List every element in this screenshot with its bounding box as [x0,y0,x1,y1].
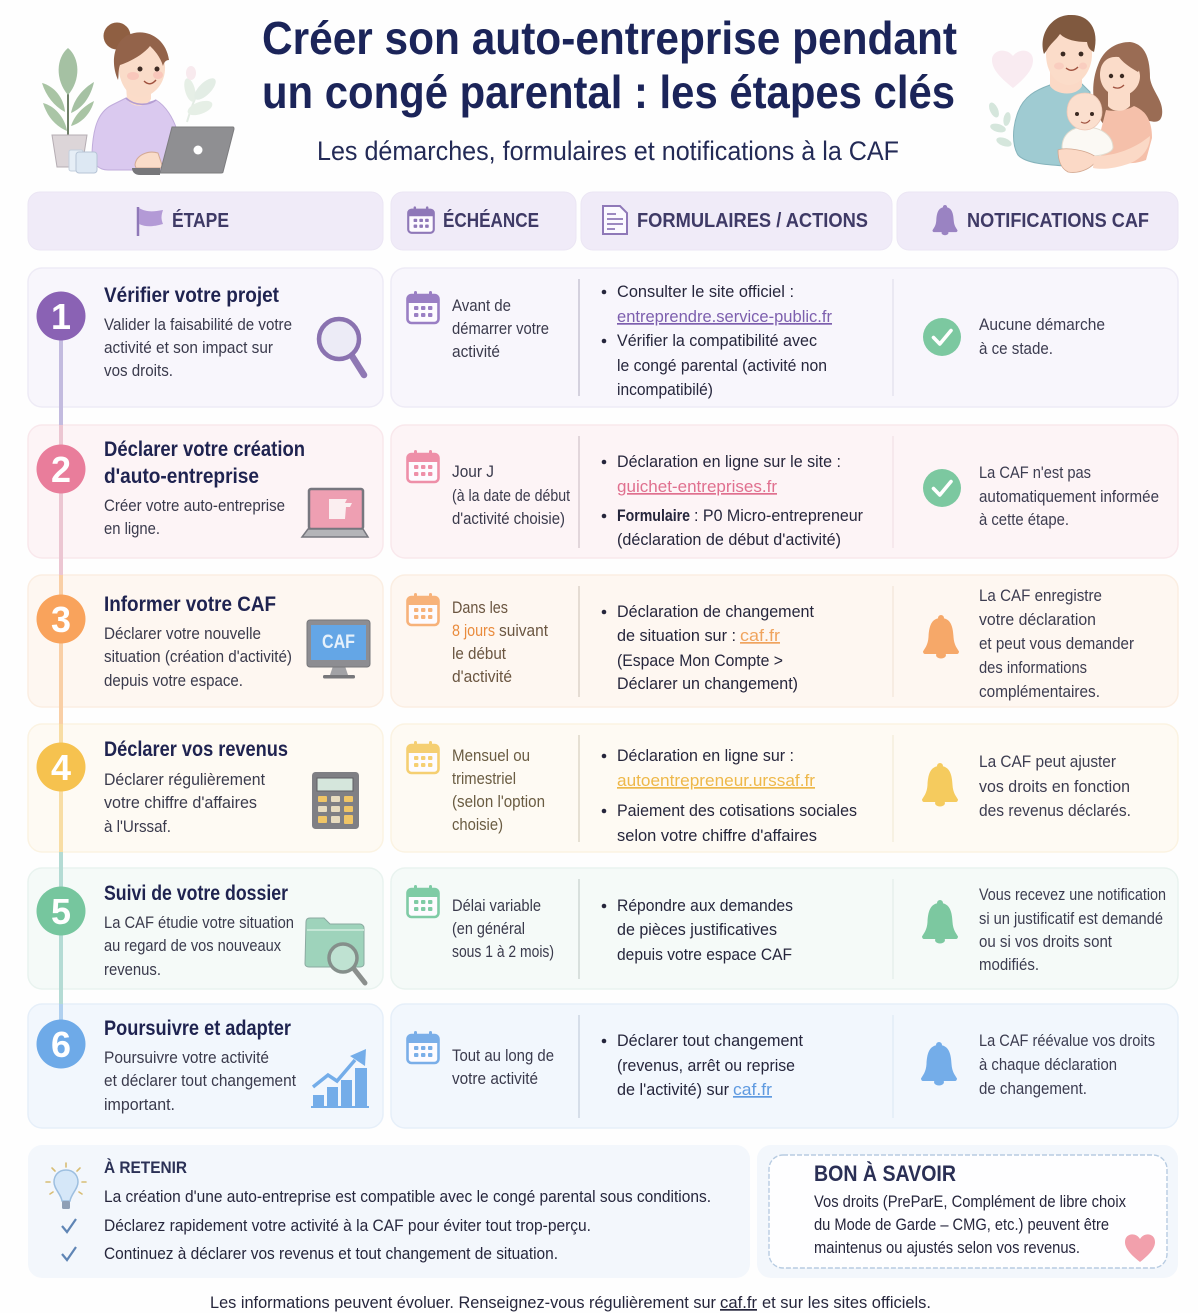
step 3 details card: des informations [979,659,1087,677]
icon: heart [1125,1234,1155,1262]
step 5 details card: Vous recevez une notification [979,886,1166,904]
step 3 details card: votre déclaration [979,611,1096,629]
panel: bon à savoir: BON À SAVOIR [814,1161,956,1186]
step 2 details card: Déclaration en ligne sur le site : [617,452,841,471]
panel: à retenir: Déclarez rapidement votre activité à la CAF pour éviter tout trop-perçu. [104,1216,591,1235]
step number 6: 6 [51,1024,71,1065]
step 4 details card: Mensuel ou [452,747,530,765]
footer note: et sur les sites officiels. [762,1293,931,1312]
step number 2: 2 [51,449,71,490]
header: notifications [897,192,1178,250]
icon: calculator [312,772,359,829]
step 3 details card: Dans les [452,599,508,617]
step 4 card: Déclarer vos revenus [104,738,288,761]
panel: bon à savoir: Vos droits (PreParE, Complément de libre choix [814,1192,1126,1211]
step 3 details card: Déclarer un changement) [617,674,798,693]
step number 2 [36,444,86,494]
step 1 card: Valider la faisabilité de votre [104,316,292,334]
header: échéance [391,192,576,250]
step 6 card [28,1004,383,1128]
subtitle: Les démarches, formulaires et notifications à la CAF [317,136,899,166]
step 1 card: activité et son impact sur [104,339,273,357]
step 4 details card: vos droits en fonction [979,778,1130,796]
step 1 details card: à ce stade. [979,340,1053,358]
step 4 details card: des revenus déclarés. [979,802,1131,820]
header: échéance: ÉCHÉANCE [443,209,539,232]
step 2 row [28,425,1178,558]
icon: bell [921,1042,957,1086]
step 4 details card: choisie) [452,816,503,834]
header: étape: ÉTAPE [172,209,229,232]
step 3 details card: complémentaires. [979,683,1100,701]
step 5 details card: de pièces justificatives [617,920,777,939]
step 6 card: Poursuivre votre activité [104,1049,269,1067]
step 3 details card: La CAF enregistre [979,587,1102,605]
step 2 details card: guichet-entreprises.fr [617,477,777,496]
step 6 row [28,1004,1178,1128]
step 3 details card: et peut vous demander [979,635,1134,653]
icon: calendar [408,450,438,482]
step 3 details card: le début [452,645,506,663]
step 2 details card [391,425,1178,558]
step 5 details card: modifiés. [979,956,1039,974]
step 6 card: Poursuivre et adapter [104,1017,291,1040]
step 3 card: situation (création d'activité) [104,648,292,666]
step 3 details card: suivant [499,622,548,640]
step 4 details card: Déclaration en ligne sur : [617,746,794,765]
step 6 details card: votre activité [452,1070,538,1088]
step 6 card: et déclarer tout changement [104,1072,296,1090]
step 1 details card: incompatibilé) [617,380,713,399]
icon: check [923,318,961,356]
icon: CAF monitor [307,620,370,678]
step 5 details card: ou si vos droits sont [979,933,1112,951]
icon: laptop [302,489,368,537]
table header row [28,192,1178,250]
step 1 row [28,268,1178,407]
step 4 card: à l'Urssaf. [104,818,171,836]
icon: bell [922,900,958,944]
step number 4: 4 [51,747,71,788]
footer note: caf.fr [720,1293,757,1312]
step 5 details card: depuis votre espace CAF [617,945,792,964]
step number 4 [36,742,86,792]
step 6 details card: à chaque déclaration [979,1056,1117,1074]
step 4 details card: La CAF peut ajuster [979,753,1116,771]
step 6 details card: Déclarer tout changement [617,1031,803,1050]
step number 1: 1 [51,296,71,337]
panel: à retenir: À RETENIR [104,1158,187,1177]
step 6 details card: La CAF réévalue vos droits [979,1032,1155,1050]
step 2 details card: (à la date de début [452,487,570,505]
footer note: Les informations peuvent évoluer. Renseignez-vous régulièrement sur [210,1293,716,1312]
step 1 details card: Aucune démarche [979,316,1105,334]
step 3 details card: Déclaration de changement [617,602,814,621]
step 2 card: Déclarer votre création [104,438,305,461]
step number 1 [36,292,86,340]
panel: à retenir: La création d'une auto-entreprise est compatible avec le congé parental sous conditions. [104,1187,711,1206]
step 1 details card: Vérifier la compatibilité avec [617,331,817,350]
step 5 row [28,868,1178,989]
step 2 details card: à cette étape. [979,511,1069,529]
step number 5 [36,886,86,936]
step 4 details card [391,724,1178,852]
step 2 details card: : P0 Micro-entrepreneur [694,506,863,525]
title: Créer son auto-entreprise pendant [262,12,957,64]
panel: à retenir: Continuez à déclarer vos revenus et tout changement de situation. [104,1244,558,1263]
header: étape [28,192,383,250]
timeline with numbered circles [36,292,86,1068]
icon: light bulb [46,1163,86,1209]
step 1 details card: entreprendre.service-public.fr [617,307,832,326]
step 3 details card: 8 jours [452,622,495,640]
step 4 card: Déclarer régulièrement [104,771,265,789]
icon: check [923,469,961,507]
step 1 details card: démarrer votre [452,320,549,338]
step 5 details card: Délai variable [452,897,541,915]
step 2 details card: d'activité choisie) [452,510,565,528]
step 3 details card: de situation sur : [617,626,736,645]
title [262,12,957,118]
step 3 details card: d'activité [452,668,512,686]
step 2 card: Créer votre auto-entreprise [104,497,285,515]
icon: growth chart [311,1049,369,1108]
step 5 card: revenus. [104,961,161,979]
title: un congé parental : les étapes clés [262,66,955,118]
panel: bon à savoir [757,1145,1178,1278]
icon: calendar [408,885,438,917]
step 3 row [28,575,1178,707]
icon: magnifying glass [319,319,364,375]
header: formulaires: FORMULAIRES / ACTIONS [637,210,868,232]
icon: check mark [62,1247,76,1260]
step 1 details card: Avant de [452,297,511,315]
header: formulaires [581,192,892,250]
step 5 details card: (en général [452,920,525,938]
panel: à retenir [28,1145,750,1278]
illustration: woman working on a laptop with plant [42,22,234,175]
step number 6 [36,1020,86,1068]
step 1 details card: Consulter le site officiel : [617,282,794,301]
step 5 card: au regard de vos nouveaux [104,937,282,955]
step 3 details card [391,575,1178,707]
step 5 card: Suivi de votre dossier [104,882,288,905]
icon: CAF monitor: CAF [322,632,355,653]
step 2 card [28,425,383,558]
step 4 row [28,724,1178,852]
icon: calendar [408,741,438,773]
step 5 details card: si un justificatif est demandé [979,910,1163,928]
step 6 details card: Tout au long de [452,1047,554,1065]
step 4 details card: autoentrepreneur.urssaf.fr [617,771,815,790]
step 4 card: votre chiffre d'affaires [104,794,257,812]
step 1 details card: activité [452,343,500,361]
step 1 card: Vérifier votre projet [104,284,279,307]
step 5 card [28,868,383,989]
icon: bell [922,763,958,806]
step 3 details card: caf.fr [740,626,780,645]
step 2 details card: automatiquement informée [979,488,1159,506]
icon: bell [923,615,959,658]
illustration: family with baby [987,15,1162,172]
step 2 details card: La CAF n'est pas [979,464,1091,482]
step 3 details card: (Espace Mon Compte > [617,651,783,670]
panel: bon à savoir: maintenus ou ajustés selon vos revenus. [814,1238,1080,1257]
step 6 details card [391,1004,1178,1128]
panel: bon à savoir: du Mode de Garde – CMG, etc.) peuvent être [814,1215,1109,1234]
step 5 details card [391,868,1178,989]
step number 3: 3 [51,599,71,640]
step 3 card: depuis votre espace. [104,672,243,690]
step number 3 [36,594,86,644]
step 4 details card: Paiement des cotisations sociales [617,801,857,820]
icon: calendar [408,593,438,625]
step 2 details card: Formulaire [617,506,690,525]
step 5 details card: sous 1 à 2 mois) [452,943,554,961]
step 5 card: La CAF étudie votre situation [104,914,294,932]
step 6 details card: caf.fr [733,1080,772,1099]
step 6 details card: de l'activité) sur [617,1080,729,1099]
step 6 details card: (revenus, arrêt ou reprise [617,1056,795,1075]
step 4 details card: selon votre chiffre d'affaires [617,826,817,845]
step 1 details card: le congé parental (activité non [617,356,827,375]
step 2 card: d'auto-entreprise [104,465,259,488]
step number 5: 5 [51,891,71,932]
step 1 card [28,268,383,407]
icon: folder with magnifier [305,918,365,983]
step 6 details card: de changement. [979,1080,1087,1098]
step 5 details card: Répondre aux demandes [617,896,793,915]
icon: check mark [62,1219,76,1232]
icon: calendar [408,291,438,323]
icon: calendar [408,1031,438,1063]
step 4 details card: (selon l'option [452,793,545,811]
step 3 card: Déclarer votre nouvelle [104,625,261,643]
step 1 details card [391,268,1178,407]
step 2 card: en ligne. [104,520,160,538]
step 2 details card: (déclaration de début d'activité) [617,530,841,549]
step 3 card: Informer votre CAF [104,593,276,616]
step 6 card: important. [104,1096,175,1114]
step 4 details card: trimestriel [452,770,516,788]
step 1 card: vos droits. [104,362,173,380]
header: notifications: NOTIFICATIONS CAF [967,210,1149,232]
step 2 details card: Jour J [452,463,494,481]
step 4 card [28,724,383,852]
step 3 card [28,575,383,707]
